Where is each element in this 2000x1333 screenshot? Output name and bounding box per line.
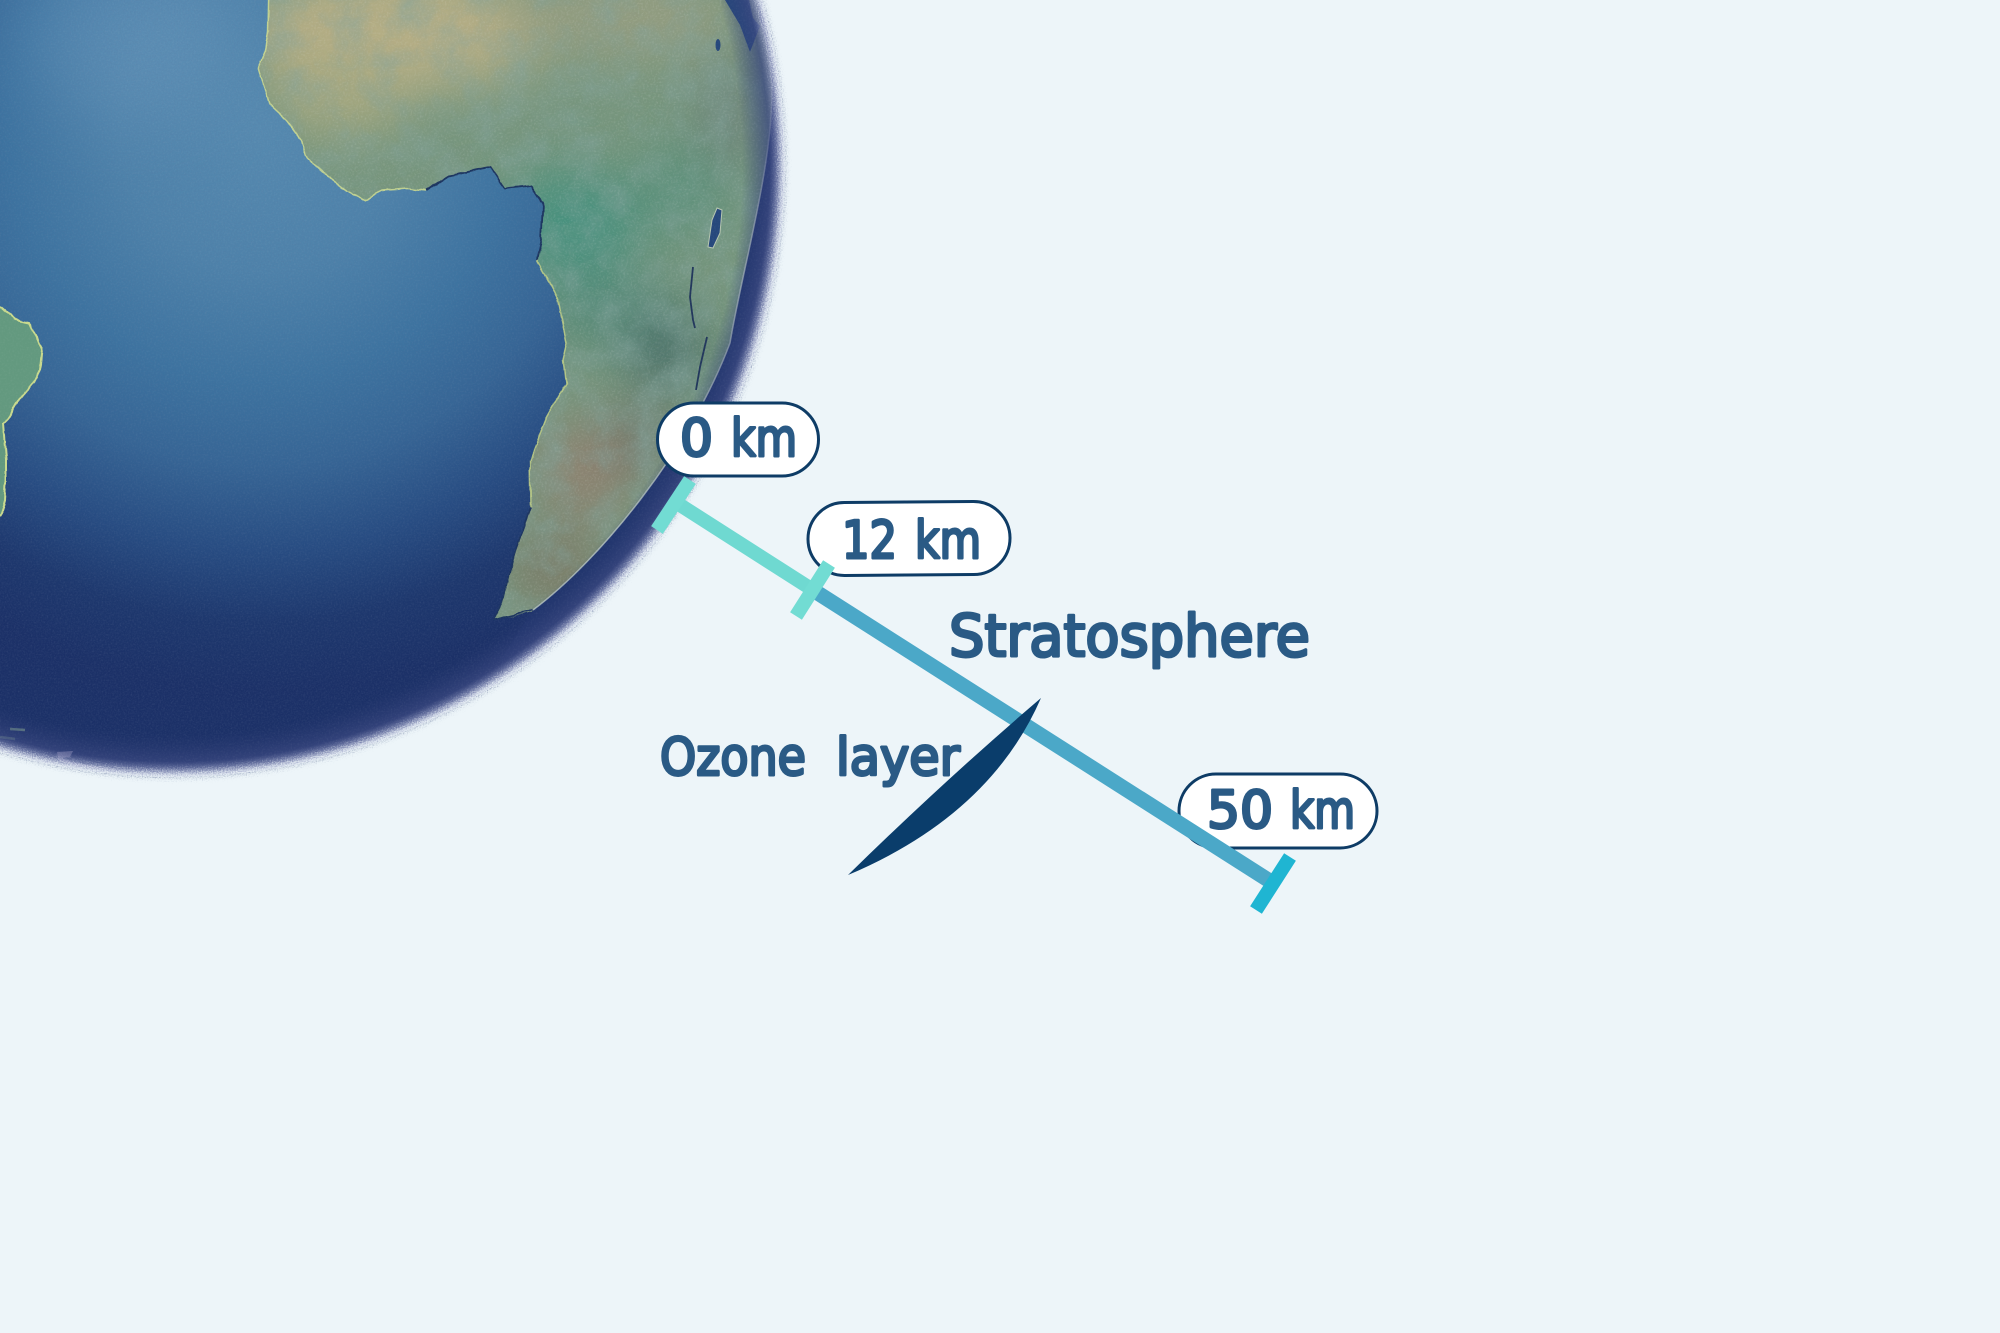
scale line start xyxy=(657,480,813,590)
ocean xyxy=(0,0,568,782)
land: north-west coastline xyxy=(258,0,426,200)
land: southern tip coastline xyxy=(493,507,533,620)
land: south-west coastline xyxy=(530,260,567,507)
lake: large xyxy=(708,208,722,248)
label: 0 km: 0 xyxy=(680,409,713,469)
antarctica fragments xyxy=(57,751,120,771)
label: 50 km xyxy=(1179,774,1377,848)
ocean grain xyxy=(0,502,514,735)
label: 12 km xyxy=(808,501,1010,576)
antarctica left marks xyxy=(0,729,25,739)
land: Africa xyxy=(258,0,772,618)
land: eastern limb line xyxy=(533,20,772,610)
land: gulf coastline xyxy=(426,167,543,260)
label: 0 km xyxy=(658,403,818,476)
rim grain xyxy=(0,0,790,790)
globe xyxy=(0,0,830,800)
stratosphere segment xyxy=(813,590,1273,883)
heading: Ozone layer xyxy=(660,728,961,788)
0 km tick xyxy=(657,480,690,530)
lake: small north xyxy=(716,39,720,51)
heading: Stratosphere: Stratosphere xyxy=(949,602,1310,670)
heading: Ozone layer: Ozone xyxy=(660,728,806,788)
heading: Ozone layer: layer xyxy=(836,728,961,788)
label: 12 km: km xyxy=(915,511,981,571)
label: 0 km: km xyxy=(731,409,797,469)
label: 50 km: 50 xyxy=(1207,781,1273,841)
ocean highlight xyxy=(22,0,214,104)
ozone layer crescent xyxy=(848,698,1041,875)
land: South America xyxy=(0,290,42,515)
label: 50 km: km xyxy=(1290,781,1355,841)
12 km tick xyxy=(796,564,829,616)
50 km tick xyxy=(1256,857,1290,910)
sea: north-east xyxy=(722,0,760,52)
continents xyxy=(0,0,800,640)
troposphere segment xyxy=(680,505,813,590)
atmosphere band beyond the land limb xyxy=(532,0,787,612)
atmospheric rim xyxy=(0,0,785,777)
label: 12 km: 12 xyxy=(842,511,897,571)
rift lines xyxy=(690,267,707,390)
